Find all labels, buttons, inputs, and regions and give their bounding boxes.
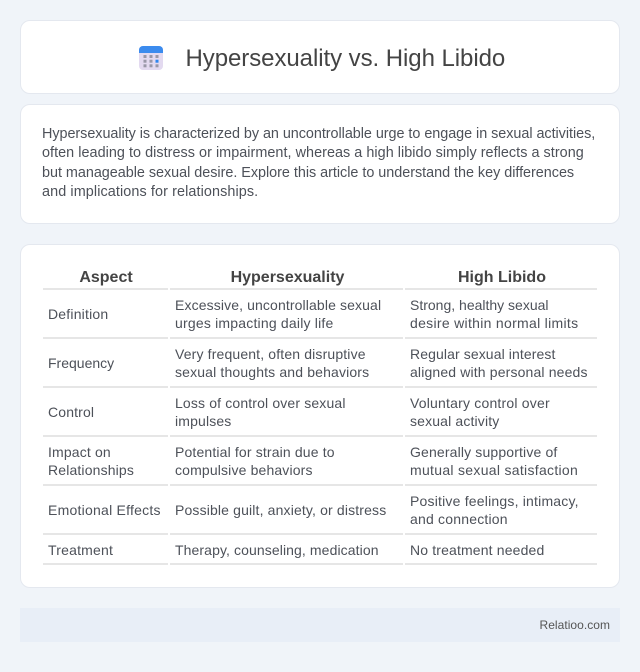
row: treatment: Therapy, counseling, medication (175, 542, 379, 558)
footer text: Relatioo.com (539, 618, 610, 632)
row: emotional effects: and connection (410, 511, 508, 527)
row: impact on relationships: Relationships (48, 462, 134, 478)
row: impact on relationships: Potential for strain due to (175, 444, 335, 460)
row: emotional effects: Possible guilt, anxiety, or distress (175, 502, 386, 518)
row: treatment: Treatment (48, 542, 113, 558)
intro text: and implications for relationships. (42, 184, 258, 200)
row: frequency: sexual thoughts and behaviors (175, 364, 369, 380)
table header: High Libido (458, 269, 546, 286)
footer bar (20, 608, 620, 642)
table header (43, 269, 597, 290)
row: treatment: No treatment needed (410, 542, 544, 558)
row: impact on relationships: Generally supportive of (410, 444, 557, 460)
row: control (43, 395, 597, 437)
row: definition: desire within normal limits (410, 315, 578, 331)
row: impact on relationships: mutual sexual satisfaction (410, 462, 578, 478)
row: frequency: Regular sexual interest (410, 346, 556, 362)
row: control: sexual activity (410, 413, 499, 429)
row: impact on relationships: Impact on (48, 444, 111, 460)
row: definition: Excessive, uncontrollable sexual (175, 297, 381, 313)
row: emotional effects: Positive feelings, intimacy, (410, 493, 579, 509)
row: impact on relationships (43, 444, 597, 486)
intro text (42, 126, 595, 200)
row: emotional effects (43, 493, 597, 535)
row: control: Loss of control over sexual (175, 395, 346, 411)
row: control: impulses (175, 413, 231, 429)
icon: calendar (139, 46, 163, 70)
panel: introduction (20, 104, 620, 224)
title: Hypersexuality vs. High Libido (186, 45, 505, 72)
panel: comparison table (20, 244, 620, 588)
row: frequency (43, 346, 597, 388)
row: control: Voluntary control over (410, 395, 550, 411)
row: frequency: aligned with personal needs (410, 364, 588, 380)
row: definition: Strong, healthy sexual (410, 297, 549, 313)
table header: Aspect (79, 269, 133, 286)
row: control: Control (48, 404, 94, 420)
row: emotional effects: Emotional Effects (48, 502, 161, 518)
row: definition: Definition (48, 306, 108, 322)
row: definition (43, 297, 597, 339)
row: impact on relationships: compulsive behaviors (175, 462, 313, 478)
intro text: Hypersexuality is characterized by an uncontrollable urge to engage in sexual activities, (42, 126, 595, 142)
row: treatment (43, 542, 597, 565)
table header: Hypersexuality (231, 269, 344, 286)
panel: title card (20, 20, 620, 94)
row: definition: urges impacting daily life (175, 315, 334, 331)
row: frequency: Frequency (48, 355, 114, 371)
row: frequency: Very frequent, often disruptive (175, 346, 366, 362)
intro text: but manageable sexual desire. Explore this article to understand the key differences (42, 165, 574, 181)
intro text: often leading to distress or impairment, whereas a high libido simply reflects a strong (42, 145, 584, 161)
